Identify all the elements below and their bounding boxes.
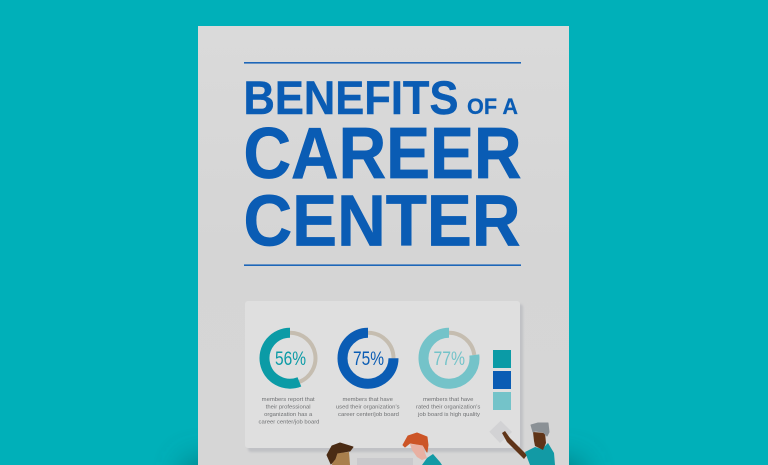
hair (531, 423, 549, 436)
laptop (357, 458, 413, 465)
title (244, 71, 522, 262)
title: career: CAREER (244, 113, 522, 194)
caption: 56%: organization has a (264, 412, 313, 418)
torso (525, 443, 555, 465)
caption: 56%: career center/job board (259, 420, 319, 426)
donut: 77%: 77% (434, 349, 465, 370)
person: red hair (403, 433, 442, 465)
paper sheet held (489, 421, 512, 443)
person: left (327, 443, 353, 465)
legend squares (493, 350, 511, 410)
title: of a: OF A (467, 94, 518, 119)
paper sheet (198, 26, 569, 465)
caption: 56%: members report that (262, 397, 315, 403)
donut: 77% (424, 333, 475, 384)
caption: 75%: used their organization's (336, 404, 400, 410)
donut: 56%: 56% (275, 349, 306, 370)
panel shadow (248, 304, 523, 452)
paper shadow (186, 462, 581, 465)
title: benefits: BENEFITS (244, 71, 458, 124)
stats panel (245, 301, 520, 448)
caption: 75%: career center/job board (338, 412, 399, 418)
donut: 56% (264, 333, 315, 384)
head (533, 432, 546, 450)
caption: 56%: their professional (266, 404, 311, 410)
caption: 75%: members that have (342, 397, 394, 403)
arm (502, 431, 527, 459)
caption: 77%: members that have (423, 397, 474, 403)
title: center: CENTER (244, 180, 520, 262)
donut: 75%: 75% (353, 349, 384, 370)
caption: 77%: rated their organization's (416, 404, 480, 410)
caption: 77%: job board is high quality (417, 412, 480, 418)
donut: 75% (342, 333, 394, 384)
person: right with paper (489, 421, 555, 465)
